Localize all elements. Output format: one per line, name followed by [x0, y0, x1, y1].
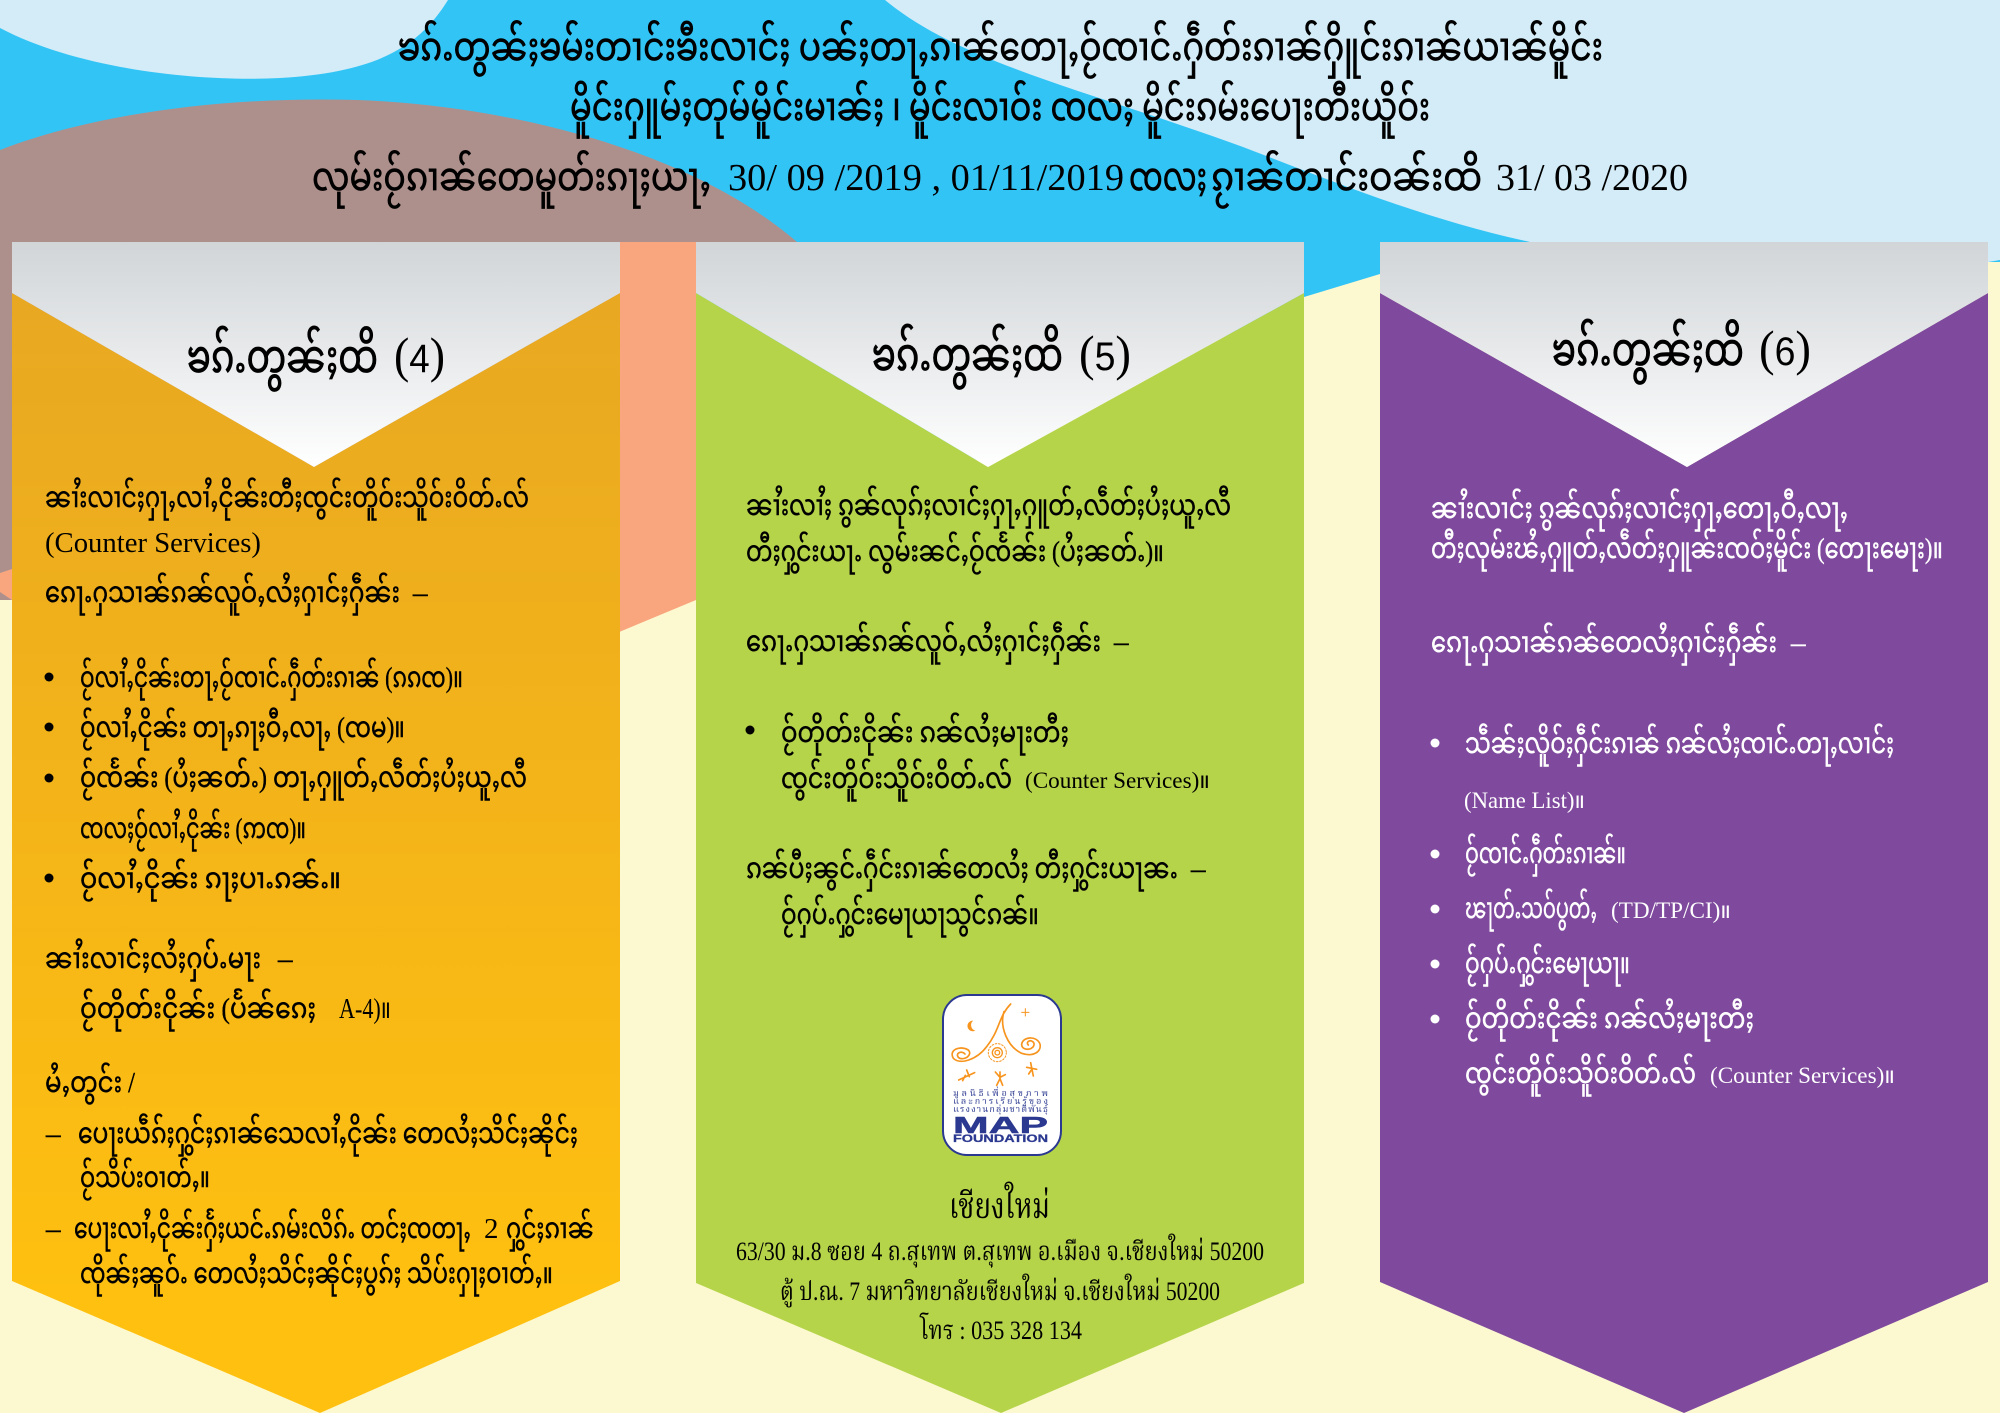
- text: section 5 body: ဝႂ်တိုတ်းငိုၼ်း ၵၼ်လႆႈမႃးတီႈ: [781, 712, 1069, 756]
- text: section 5 body: –: [1190, 853, 1206, 885]
- text: Chiang Mai address: เชียงใหม่: [949, 1181, 1050, 1226]
- text: section 6 body: (Name List)။: [1464, 788, 1585, 813]
- text: section 4 body: ဝႂ်သိပ်းဝၢတ်ႇ။: [80, 1158, 210, 1201]
- logo Thai text: แรงงานกลุ่มชาติพันธุ์: [953, 1103, 1048, 1115]
- text: section 5 body: ၼၢႆးလၢႆႈ ၵွၼ်လုၵ်ႈလၢင်ႈႁႃႇႁူတ်ႇလဵတ်ႈပႆႈယူႇလီ: [746, 485, 1231, 529]
- text: section 5 body: ၵၼ်ပီႈၼွင်ႉႁဵင်းၵၢၼ်တေလႆႈ တီႈႁွင်းယႃၼႉ: [746, 848, 1178, 892]
- text: section 4 body: ဝႂ်ၸႅၼ်း (ပႆႈၼတ်ႉ) တႃႇႁူတ်ႇလဵတ်ႈပႆႈယူႇလီ: [80, 757, 527, 801]
- title: ၶၵ်ႉတွၼ်ႈၶမ်းတၢင်းၶီးလၢင်ႈ ပၼ်ႈတႃႇၵၢၼ်တေႃႇဝႂ်ၸၢင်ႉႁဵတ်းၵၢၼ်ႁိူင်းၵၢၼ်ယၢၼ်မိူင်း: [398, 21, 1603, 78]
- text: section 6 body: ၵေႃႉႁသၢၼ်ၵၼ်တေလႆႈႁၢင်ႈႁဵၼ်း: [1431, 622, 1777, 666]
- title: 31/ 03 /2020: [1496, 157, 1688, 199]
- text: section 4 body: –: [45, 1118, 61, 1150]
- text: section 6 body: (TD/TP/CI)။: [1611, 898, 1731, 923]
- icon: roof, spirals, sun, moon and figures: [952, 1004, 1040, 1085]
- heading: section 5: (5): [1079, 325, 1131, 381]
- text: section 4 body: –: [277, 943, 293, 975]
- logo: MAP Foundation: [943, 995, 1061, 1155]
- heading: section 6: ၶၵ်ႉတွၼ်ႈထိ: [1552, 318, 1744, 384]
- panel: section 5: [696, 242, 1304, 1413]
- panel 4 header: [12, 242, 620, 467]
- text: section 6 body: ဝႂ်ႁပ်ႉႁွင်းမေႃယႃ။: [1465, 944, 1630, 987]
- text: section 4 body: ၵေႃႉႁသၢၼ်ၵၼ်လူဝ်ႇလႆႈႁၢင်ႈႁဵၼ်း: [45, 572, 400, 616]
- logo wordmark: MAP: [953, 1112, 1048, 1138]
- title: ၵႂၢၼ်တၢင်းဝၼ်းထိ: [1211, 151, 1482, 208]
- logo Thai text: มูลนิธิเพื่อสุขภาพ: [953, 1086, 1048, 1099]
- heading: section 4: (4): [394, 327, 445, 383]
- text: section 4 body: ပေႃးလၢႆႇငိုၼ်းႁႅႈယင်ႉၵမ်းလိၵ်ႉ တင်ႈၸတႃႇ: [74, 1208, 471, 1252]
- text: section 4 body: (Counter Services): [45, 527, 261, 559]
- logo Thai text: [953, 1086, 1048, 1115]
- text: section 4 body: ၸလႈဝႂ်လၢႆႇငိုၼ်း (ဢၸ)။: [80, 808, 306, 852]
- title: ၸလႈ: [1129, 156, 1207, 199]
- text: section 4 body: ၼၢႆးလၢင်ႈႁႃႇလၢႆႇငိုၼ်းတီႈၸွင်းတိူဝ်းသိူဝ်းဝိတ်ႉလ်: [45, 477, 529, 521]
- logo wordmark: FOUNDATION: [953, 1133, 1048, 1145]
- text: section 6 body: ၽႃတ်ႉသဝ်ပွတ်ႇ: [1465, 889, 1597, 932]
- text: section 6 body: ၼၢႆးလၢင်ႈ ၵွၼ်လုၵ်ႈလၢင်ႈႁႃႇတေႃႇဝီႇလႃႇ: [1431, 488, 1848, 532]
- text: section 4 body: –: [412, 577, 428, 609]
- text: section 5 body: ၵေႃႉႁသၢၼ်ၵၼ်လူဝ်ႇလႆႈႁၢင်ႈႁဵၼ်း: [746, 621, 1101, 665]
- text: section 6 body: သဵၼ်ႈလိူဝ်ႈႁဵင်းၵၢၼ် ၵၼ်လႆႈၸၢင်ႉတႃႇလၢင်ႈ: [1465, 723, 1894, 767]
- text: section 6 body: ဝႂ်တိုတ်းငိုၼ်း ၵၼ်လႆႈမႃးတီႈ: [1465, 998, 1754, 1042]
- text: section 5 body: ၸွင်းတိူဝ်းသိူဝ်းဝိတ်ႉလ်: [781, 759, 1012, 802]
- text: section 4 body: A-4)။: [339, 993, 391, 1025]
- title: မိူင်းႁူမ်ႈတုမ်မိူင်းမၢၼ်ႈ ၊ မိူင်းလၢဝ်း ၸလႈ မိူင်းၵမ်းပေႃးတီးယိူဝ်း: [570, 81, 1430, 138]
- text: section 5 body: (Counter Services)။: [1025, 768, 1210, 793]
- text: section 4 body: ႁွင်ႈၵၢၼ်: [506, 1209, 594, 1252]
- text: section 4 body: ဝႂ်လၢႆႇငိုၼ်းတႃႇဝႂ်ၸၢင်ႉႁဵတ်းၵၢၼ် (ၵၵၸ)။: [80, 657, 463, 701]
- text: section 6 body: –: [1790, 627, 1806, 659]
- text: section 6 body: (Counter Services)။: [1710, 1063, 1895, 1088]
- text: section 5 body: တီႈႁွင်းယႃႉ လွမ်းၼင်ႇဝႂ်ၸႅၼ်း (ပႆႈၼတ်ႉ)။: [746, 531, 1164, 575]
- text: Chiang Mai address: ตู้ ป.ณ. 7 มหาวิทยาลัยเชียงใหม่ จ.เชียงใหม่ 50200: [780, 1273, 1220, 1309]
- text: section 5 body: ဝႂ်ႁပ်ႉႁွင်းမေႃယႃသွင်ၵၼ်။: [781, 895, 1039, 938]
- panel 6 header: [1380, 242, 1988, 467]
- text: section 6 body: [1430, 488, 1943, 1097]
- text: section 5 body: [746, 485, 1231, 938]
- text: section 4 body: ၼၢႆးလၢင်ႈလႆႈႁပ်ႉမႃး: [45, 938, 261, 982]
- text: section 6 body: ၸွင်းတိူဝ်းသိူဝ်းဝိတ်ႉလ်: [1465, 1054, 1696, 1097]
- title: 30/ 09 /2019 , 01/11/2019: [728, 157, 1124, 199]
- text: section 4 body: ပေႃးယဵၵ်ႈႁွင်ႈၵၢၼ်သေလၢႆႇငိုၼ်း တေလႆႈသိင်ႈၼိုင်ႈ: [78, 1113, 578, 1157]
- title: လုမ်းဝႂ်ၵၢၼ်တေမူတ်းၵႃႈယႃႇ: [312, 151, 711, 208]
- panel 5 header: [696, 242, 1304, 467]
- text: section 4 body: –: [45, 1213, 61, 1245]
- text: Chiang Mai address: [736, 1181, 1264, 1345]
- panel: section 6: [1380, 242, 1988, 1413]
- text: section 5 body: –: [1113, 626, 1129, 658]
- heading: section 4: ၶၵ်ႉတွၼ်ႈထိ: [187, 325, 378, 391]
- text: section 4 body: [44, 477, 594, 1297]
- logo wordmark: [953, 1112, 1048, 1145]
- title: [312, 21, 1688, 208]
- text: Chiang Mai address: 63/30 ม.8 ซอย 4 ถ.สุเทพ ต.สุเทพ อ.เมือง จ.เชียงใหม่ 50200: [736, 1233, 1264, 1269]
- text: section 4 body: 2: [484, 1213, 498, 1245]
- text: Chiang Mai address: โทร : 035 328 134: [919, 1312, 1082, 1345]
- text: section 4 body: ဝႂ်လၢႆႇငိုၼ်း ၵႃႈပၢႉၵၼ်ႉ။: [80, 858, 341, 902]
- heading: section 5: ၶၵ်ႉတွၼ်ႈထိ: [872, 323, 1063, 389]
- text: section 6 body: ဝႂ်ၸၢင်ႉႁဵတ်းၵၢၼ်။: [1465, 834, 1626, 877]
- panel: section 4: [12, 242, 620, 1413]
- logo Thai text: และการเรียนรู้ของ: [953, 1096, 1048, 1107]
- text: section 4 body: မႆႇတွင်း /: [45, 1062, 136, 1104]
- text: section 4 body: ဝႂ်တိုတ်းငိုၼ်း (ပႅၼ်ၵေႈ: [80, 989, 316, 1032]
- text: section 4 body: ဝႂ်လၢႆႇငိုၼ်း တႃႇၵႃႈဝီႇလႃႇ (ၸမ)။: [80, 707, 405, 751]
- text: section 4 body: ၸိုၼ်ႈၼူဝ်ႉ တေလႆႈသိင်ႈၼိုင်ႈပွၵ်ႈ သိပ်းႁႃႈဝၢတ်ႇ။: [80, 1253, 553, 1297]
- heading: section 6: (6): [1759, 320, 1811, 376]
